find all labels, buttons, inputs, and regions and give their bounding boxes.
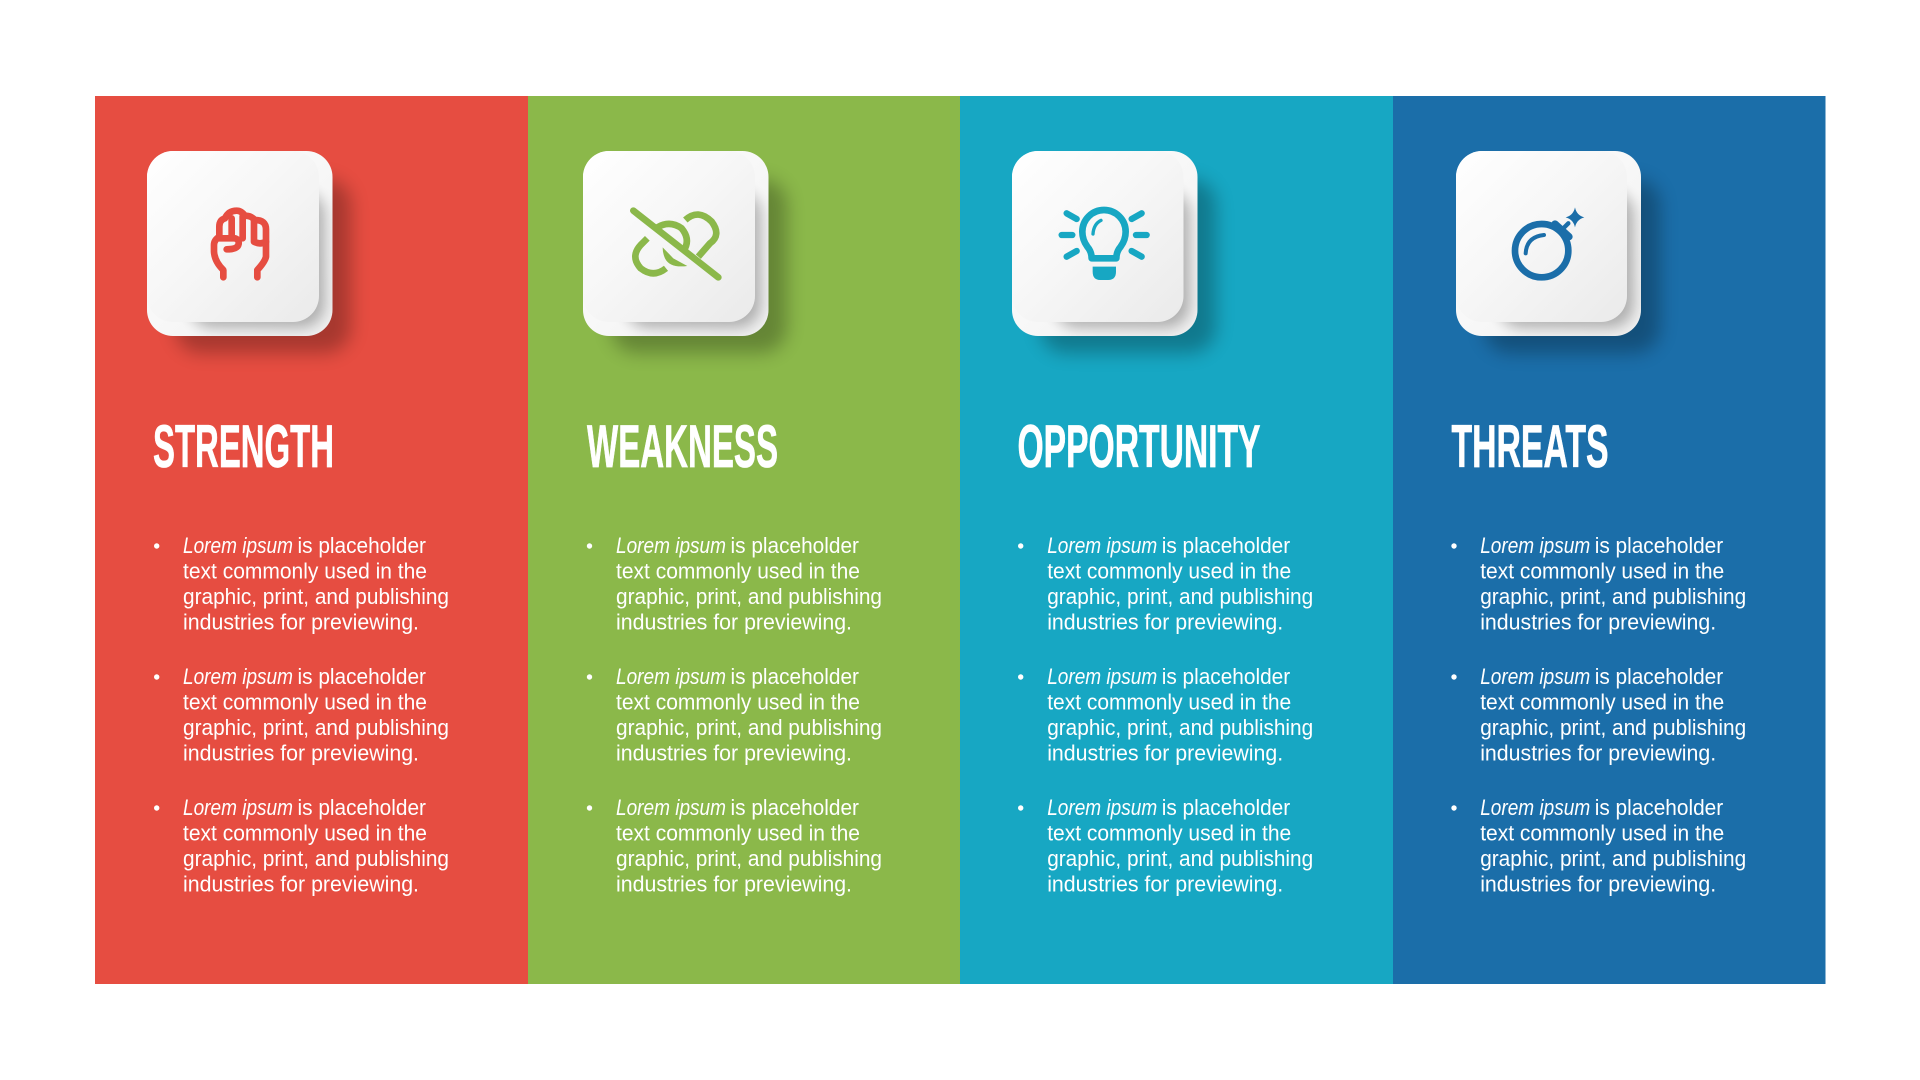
bullet list: threats: industries for previewing. <box>1480 610 1716 634</box>
icon card: fist <box>147 151 351 353</box>
bullet list: weakness: is placeholder <box>730 664 859 689</box>
bullet list: weakness <box>587 533 882 896</box>
bullet list: strength: Lorem ipsum <box>183 664 293 689</box>
bullet list: threats: industries for previewing. <box>1480 740 1716 766</box>
bullet list: opportunity: is placeholder <box>1162 533 1291 558</box>
bullet list: opportunity: Lorem ipsum <box>1047 664 1157 689</box>
bullet list: weakness: is placeholder <box>730 795 859 820</box>
icon: broken chain <box>633 211 718 277</box>
bullet list: weakness: Lorem ipsum <box>616 533 726 558</box>
bullet list: weakness: is placeholder <box>730 533 859 558</box>
bullet list: opportunity: industries for previewing. <box>1047 872 1283 896</box>
panel: strength <box>95 96 528 984</box>
bullet list: opportunity: text commonly used in the <box>1047 690 1291 714</box>
bullet list: weakness: industries for previewing. <box>616 740 852 766</box>
bullet list: strength: is placeholder <box>298 795 426 820</box>
bullet list: opportunity: is placeholder <box>1162 664 1291 689</box>
bullet list: threats: text commonly used in the <box>1480 690 1724 714</box>
bullet list: weakness: text commonly used in the <box>616 558 860 584</box>
bullet list: opportunity: Lorem ipsum <box>1047 533 1157 558</box>
icon: light bulb <box>1062 210 1147 280</box>
bullet list: strength: Lorem ipsum <box>183 533 293 558</box>
icon card: light bulb <box>1012 151 1216 353</box>
bullet list: weakness: Lorem ipsum <box>616 795 726 820</box>
bullet list: threats: text commonly used in the <box>1480 558 1724 584</box>
bullet list: weakness: Lorem ipsum <box>616 664 726 689</box>
bullet list: strength: industries for previewing. <box>183 610 419 634</box>
bullet list: strength: text commonly used in the <box>183 558 427 584</box>
panel: threats <box>1393 96 1826 984</box>
bullet list: threats: graphic, print, and publishing <box>1480 846 1746 871</box>
icon card: bomb <box>1456 151 1660 353</box>
bullet list: opportunity: text commonly used in the <box>1047 558 1291 584</box>
bullet list: opportunity: graphic, print, and publishing <box>1047 715 1313 740</box>
heading: strength: STRENGTH <box>153 413 334 480</box>
heading: weakness: WEAKNESS <box>587 413 778 480</box>
bullet list: strength: industries for previewing. <box>183 872 419 896</box>
bullet list: strength: graphic, print, and publishing <box>183 584 449 609</box>
bullet list: threats: Lorem ipsum <box>1480 533 1590 558</box>
bullet list: strength: text commonly used in the <box>183 820 427 846</box>
bullet list: threats: Lorem ipsum <box>1480 795 1590 820</box>
bullet list: opportunity: graphic, print, and publishing <box>1047 584 1313 609</box>
bullet list: weakness: industries for previewing. <box>616 610 852 634</box>
bullet list: opportunity: is placeholder <box>1162 795 1291 820</box>
bullet list: threats: is placeholder <box>1595 533 1724 558</box>
bullet list: threats: Lorem ipsum <box>1480 664 1590 689</box>
bullet list: threats: is placeholder <box>1595 664 1724 689</box>
bullet list: strength <box>154 533 449 896</box>
bullet list: weakness: graphic, print, and publishing <box>616 715 882 740</box>
bullet list: strength: Lorem ipsum <box>183 795 293 820</box>
bullet list: strength: graphic, print, and publishing <box>183 715 449 740</box>
heading: threats: THREATS <box>1452 413 1608 480</box>
bullet list: threats: is placeholder <box>1595 795 1724 820</box>
bullet list: threats: text commonly used in the <box>1480 820 1724 846</box>
heading: opportunity: OPPORTUNITY <box>1018 413 1260 480</box>
bullet list: strength: is placeholder <box>298 664 426 689</box>
icon: fist <box>214 211 266 277</box>
bullet list: weakness: graphic, print, and publishing <box>616 584 882 609</box>
bullet list: opportunity: Lorem ipsum <box>1047 795 1157 820</box>
bullet list: threats: industries for previewing. <box>1480 872 1716 896</box>
bullet list: threats: graphic, print, and publishing <box>1480 584 1746 609</box>
bullet list: weakness: industries for previewing. <box>616 872 852 896</box>
bullet list: strength: is placeholder <box>298 533 426 558</box>
bullet list: opportunity: graphic, print, and publishing <box>1047 846 1313 871</box>
bullet list: strength: graphic, print, and publishing <box>183 846 449 871</box>
panel: weakness <box>528 96 961 984</box>
bullet list: opportunity: text commonly used in the <box>1047 820 1291 846</box>
bullet list: threats <box>1451 533 1746 896</box>
bullet list: strength: text commonly used in the <box>183 690 427 714</box>
bullet list: weakness: text commonly used in the <box>616 690 860 714</box>
bullet list: threats: graphic, print, and publishing <box>1480 715 1746 740</box>
bullet list: weakness: text commonly used in the <box>616 820 860 846</box>
bullet list: strength: industries for previewing. <box>183 740 419 766</box>
bullet list: weakness: graphic, print, and publishing <box>616 846 882 871</box>
icon: bomb <box>1515 207 1584 277</box>
bullet list: opportunity <box>1018 533 1313 896</box>
panel: opportunity <box>960 96 1394 984</box>
icon card: broken chain <box>583 151 787 353</box>
bullet list: opportunity: industries for previewing. <box>1047 740 1283 766</box>
bullet list: opportunity: industries for previewing. <box>1047 610 1283 634</box>
